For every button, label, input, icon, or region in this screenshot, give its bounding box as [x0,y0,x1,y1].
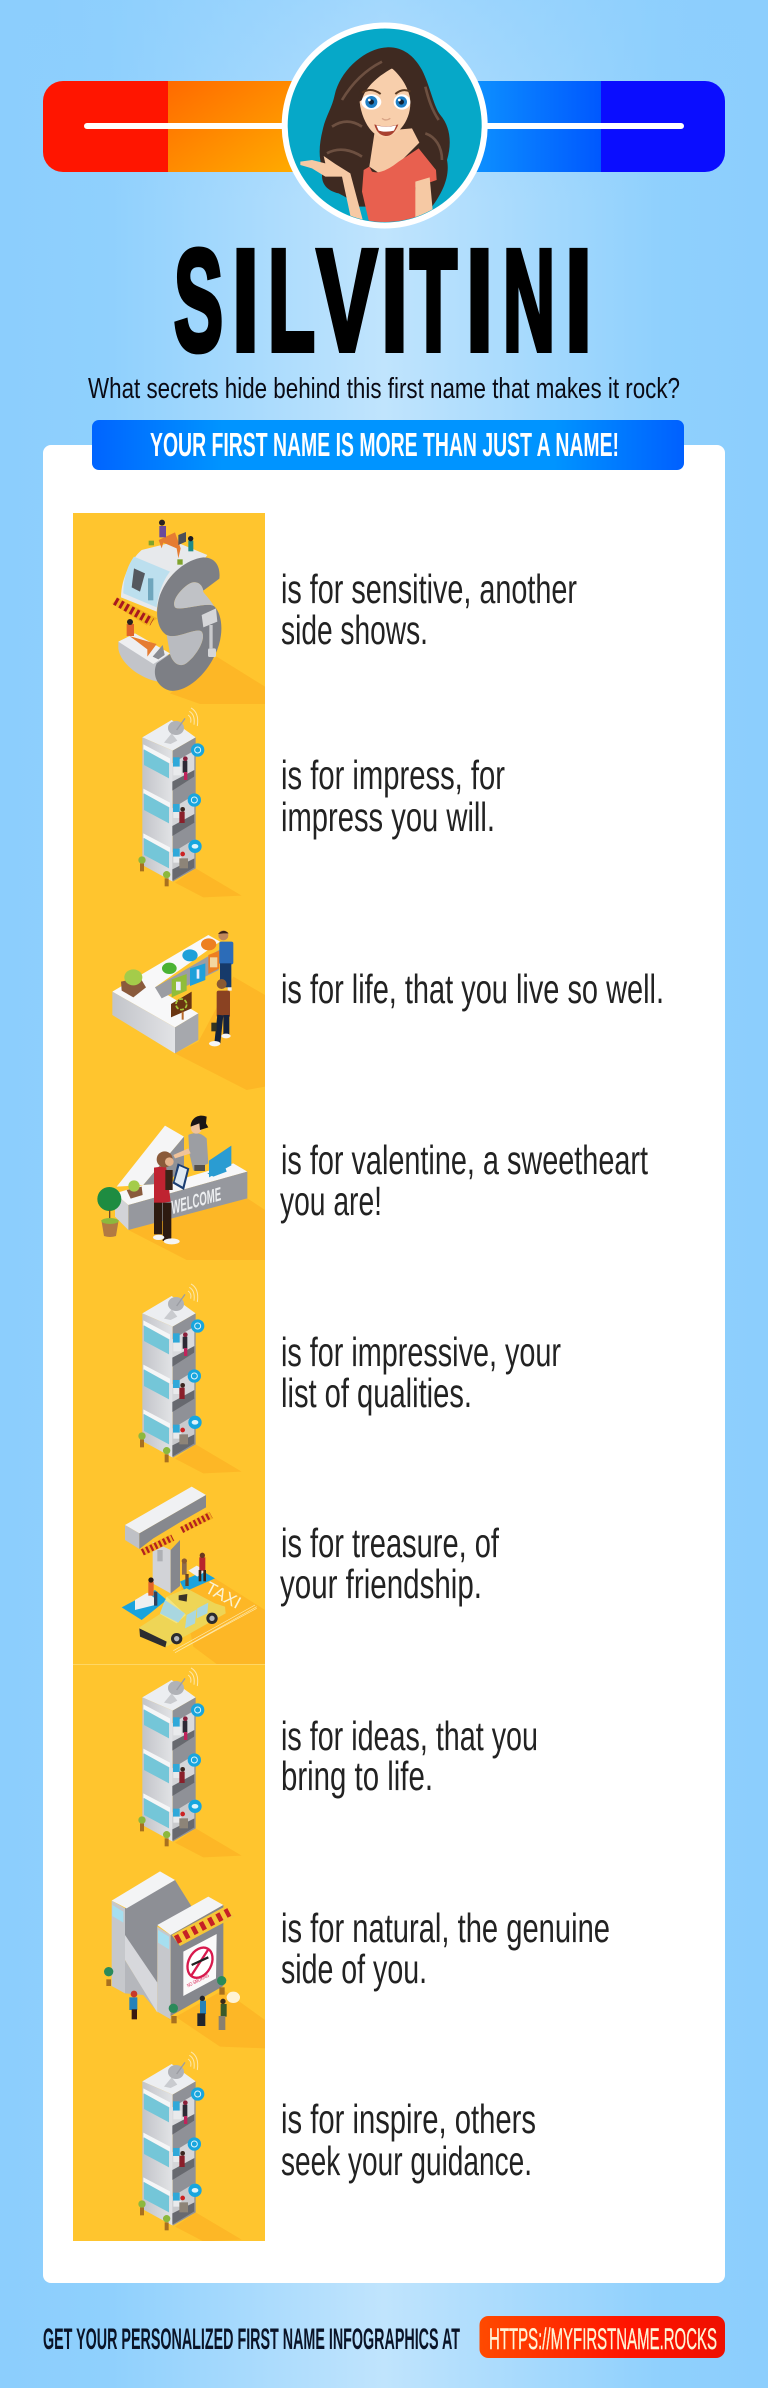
illustration column [97,520,265,2241]
row text: I impress: impress you will. [281,794,495,840]
row text: V: you are! [280,1178,382,1224]
icon: letter N no smoking building [104,1871,265,2048]
row text: N: is for natural, the genuine [281,1905,610,1951]
icon: letter I tower 1 [138,708,242,897]
title: I [565,220,592,381]
row text: I ideas: bring to life. [281,1753,433,1799]
row text: S [281,566,577,653]
row text: S: is for sensitive, another [281,566,577,612]
row text: I inspire [281,2096,536,2184]
row text: I impressive [281,1329,561,1416]
icon: letter V welcome desk [97,1116,265,1260]
title: T [410,220,457,381]
avatar portrait [282,22,488,228]
row text: I inspire: is for inspire, others [281,2096,536,2142]
row text: T [280,1520,499,1607]
row text: V [280,1137,648,1224]
icon: letter I tower 4 [138,2052,242,2241]
title: I [232,220,259,381]
title: V [317,220,377,381]
icon: letter L recycling counter [112,930,265,1090]
yellow illustration panel [73,513,265,2241]
row text: I impress [281,752,505,840]
icon: letter I tower 3 [138,1668,242,1857]
row text: I impressive: is for impressive, your [281,1329,561,1375]
row text: I ideas [281,1713,538,1799]
icon: letter I tower 2 [138,1284,242,1473]
title: I [381,220,408,381]
row text: I impressive: list of qualities. [281,1370,472,1416]
title: N [503,220,555,381]
title [174,220,592,381]
icon: letter V welcome desk: WELCOME [171,1184,222,1219]
row text: T: your friendship. [280,1561,482,1607]
icon: letter S building [112,520,265,704]
row text: I impress: is for impress, for [281,752,505,798]
title: L [268,220,315,381]
banner [92,420,684,470]
title: I [466,220,493,381]
row text: N [281,1905,610,1992]
title: S [174,220,223,381]
icon: letter T taxi stand: TAXI [202,1578,244,1613]
footer url button [480,2316,725,2358]
row text: T: is for treasure, of [281,1520,499,1566]
white content card [43,445,725,2283]
icon: letter T taxi stand [122,1487,265,1664]
row text: N: side of you. [281,1946,427,1992]
row text: S: side shows. [281,607,428,653]
row text: I inspire: seek your guidance. [281,2138,532,2184]
row text: I ideas: is for ideas, that you [281,1713,538,1759]
icon: letter N no smoking building: NO SMOKING [186,1973,210,1989]
header colour bar [43,81,725,172]
